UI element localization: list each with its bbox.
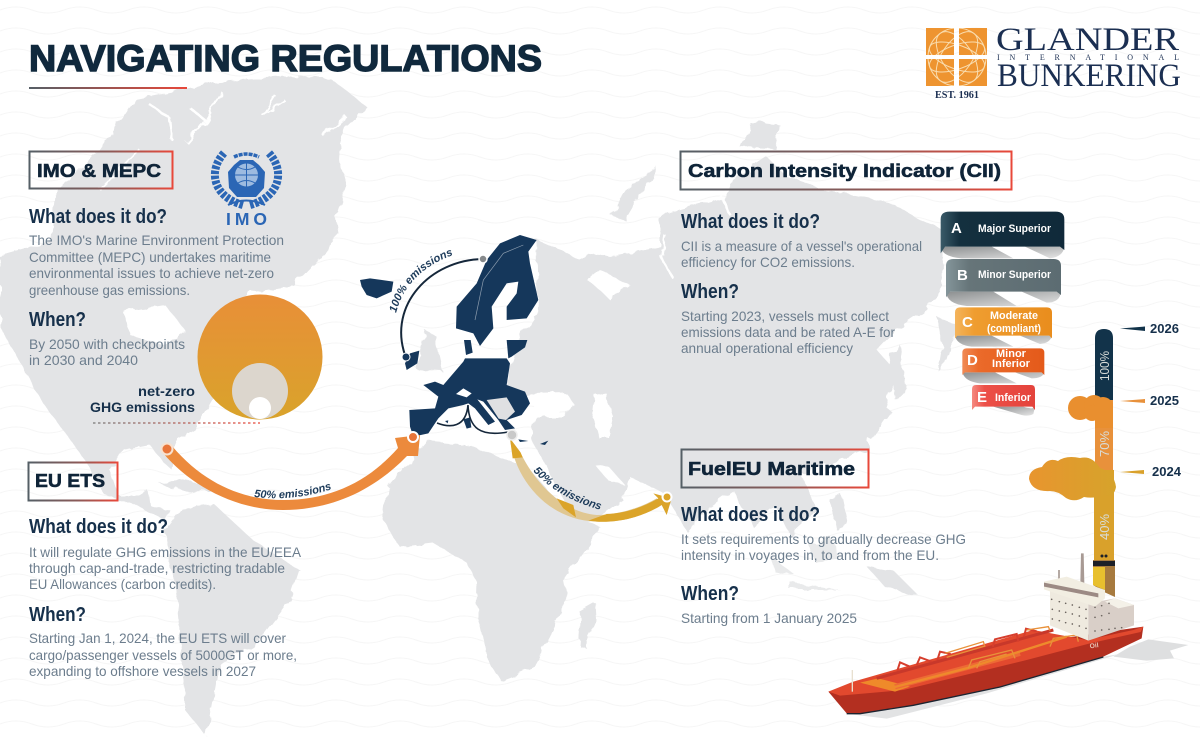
text: when: When?	[681, 281, 739, 303]
logo: Glander International Bunkering	[926, 28, 1180, 98]
chart: CII rating ribbons: E	[977, 389, 987, 406]
title underline	[29, 87, 187, 89]
text: what does it do: What does it do?	[681, 211, 820, 233]
ribbon A	[941, 212, 1064, 258]
cloud 2024	[1029, 457, 1116, 500]
chart: net-zero nested circles	[198, 294, 322, 420]
cloud 2025	[1068, 395, 1113, 428]
arrow: 100% emissions arc	[390, 250, 488, 362]
chart: CII rating ribbons: A	[951, 220, 962, 237]
text: what does it do	[29, 516, 302, 592]
ribbon B	[946, 259, 1061, 306]
logo: Glander International Bunkering: INTERNATIONAL	[997, 53, 1179, 62]
timeline: 2024: 2024	[1152, 464, 1182, 479]
chart: CII rating ribbons: Minor Superior	[978, 269, 1052, 281]
timeline: 2025: 2025	[1150, 393, 1179, 408]
text: when	[29, 604, 297, 679]
text: what does it do: CII is a measure of a vessel's operational	[681, 238, 922, 254]
chart: CII rating ribbons: Minor	[996, 348, 1027, 360]
text: what does it do: It will regulate GHG emissions in the EU/EEA	[29, 544, 302, 560]
text: what does it do: EU Allowances (carbon credits).	[29, 576, 216, 592]
text: when: Starting 2023, vessels must collect	[681, 308, 889, 324]
text: what does it do: intensity in voyages in, to and from the EU.	[681, 547, 939, 563]
text: what does it do: What does it do?	[29, 206, 167, 228]
chart: emissions funnel: 70%	[1097, 431, 1112, 457]
heading box: FuelEU Maritime	[682, 450, 868, 488]
chart: CII rating ribbons: B	[957, 267, 968, 284]
text: when: Starting Jan 1, 2024, the EU ETS will cover	[29, 630, 286, 646]
text: what does it do: It sets requirements to gradually decrease GHG	[681, 531, 966, 547]
net-zero label	[90, 383, 260, 423]
logo: Glander International Bunkering: EST. 1961	[935, 90, 979, 101]
ribbon E	[972, 385, 1035, 416]
text: when: expanding to offshore vessels in 2027	[29, 663, 256, 679]
arrow: gold 50% emissions	[506, 430, 672, 522]
text: when: By 2050 with checkpoints	[29, 336, 185, 352]
chart: CII rating ribbons: C	[962, 314, 973, 331]
chart: CII rating ribbons: Major Superior	[978, 223, 1052, 235]
logo: Glander International Bunkering: BUNKERING	[997, 58, 1181, 94]
net-zero label: net-zero	[138, 383, 195, 399]
illustration: ship superstructure	[1044, 553, 1134, 650]
icon: IMO emblem: IMO	[226, 209, 267, 229]
timeline: 2025	[1120, 393, 1179, 408]
arrow: gold 50% emissions: 50% emissions	[534, 466, 602, 510]
text: what does it do: Committee (MEPC) undertakes maritime	[29, 249, 271, 265]
illustration: ship superstructure: Oil	[1089, 642, 1099, 650]
text: when: When?	[681, 583, 739, 605]
chart: CII rating ribbons: D	[967, 352, 978, 369]
chart: CII rating ribbons: (compliant)	[987, 323, 1041, 335]
heading box: EU ETS: EU ETS	[35, 471, 105, 491]
text: what does it do: greenhouse gas emissions.	[29, 282, 190, 298]
chart: emissions funnel: 100%	[1097, 351, 1112, 381]
text: when: emissions data and be rated A-E for	[681, 324, 895, 340]
text: what does it do: The IMO's Marine Environment Protection	[29, 232, 284, 248]
chart: emissions funnel: 40%	[1097, 514, 1112, 540]
text: when: cargo/passenger vessels of 5000GT or more,	[29, 647, 297, 663]
heading box: FuelEU Maritime: FuelEU Maritime	[688, 459, 855, 479]
arrow: 100% emissions arc: 100% emissions	[390, 250, 452, 313]
heading box: IMO & MEPC: IMO & MEPC	[37, 161, 161, 181]
text: when: in 2030 and 2040	[29, 352, 138, 368]
world map	[0, 75, 957, 737]
map: Europe highlighted	[360, 235, 548, 445]
panel: IMO & MEPC	[29, 152, 322, 423]
timeline: 2026	[1120, 321, 1179, 336]
net-zero label: GHG emissions	[90, 399, 195, 415]
arrow: orange 50% emissions	[160, 431, 420, 510]
text: when: When?	[29, 604, 86, 626]
timeline: 2026: 2026	[1150, 321, 1179, 336]
chart: CII rating ribbons: Inferior	[995, 392, 1032, 404]
panel: Carbon Intensity Indicator	[680, 152, 1012, 356]
text: when	[29, 309, 185, 368]
text: when	[681, 583, 857, 626]
text: when: annual operational efficiency	[681, 340, 853, 356]
ribbon C	[955, 307, 1052, 347]
icon: IMO emblem	[215, 153, 278, 229]
arrow: orange 50% emissions: 50% emissions	[254, 484, 331, 498]
chart: CII rating ribbons	[941, 212, 1064, 416]
heading box: EU ETS	[28, 462, 118, 500]
chart: CII rating ribbons: Inferior	[992, 358, 1031, 370]
text: what does it do	[681, 211, 922, 270]
heading box: IMO & MEPC	[30, 152, 172, 188]
text: when: Starting from 1 January 2025	[681, 610, 857, 626]
text: when	[681, 281, 895, 356]
text: what does it do: efficiency for CO2 emissions.	[681, 254, 855, 270]
chart: CII rating ribbons: Moderate	[990, 310, 1038, 322]
panel: FuelEU Maritime	[681, 450, 966, 626]
timeline: 2024	[1120, 464, 1182, 479]
heading box: CII: Carbon Intensity Indicator (CII)	[688, 161, 1001, 181]
chart: emissions funnel	[1029, 321, 1182, 597]
text: what does it do: environmental issues to achieve net-zero	[29, 265, 274, 281]
text: when: When?	[29, 309, 86, 331]
text: what does it do: through cap-and-trade, restricting tradable	[29, 560, 285, 576]
text: what does it do	[29, 206, 284, 298]
heading box: CII	[680, 152, 1012, 190]
small arcs: Mediterranean	[437, 405, 508, 433]
ribbon D	[962, 348, 1044, 383]
logo: Glander International Bunkering: GLANDER	[996, 22, 1179, 58]
panel: EU ETS	[28, 462, 302, 679]
text: what does it do: What does it do?	[29, 516, 168, 538]
text: what does it do	[681, 504, 966, 563]
text: what does it do: What does it do?	[681, 504, 820, 526]
illustration: ship hull	[828, 627, 1188, 719]
title: NAVIGATING REGULATIONS	[29, 38, 542, 79]
